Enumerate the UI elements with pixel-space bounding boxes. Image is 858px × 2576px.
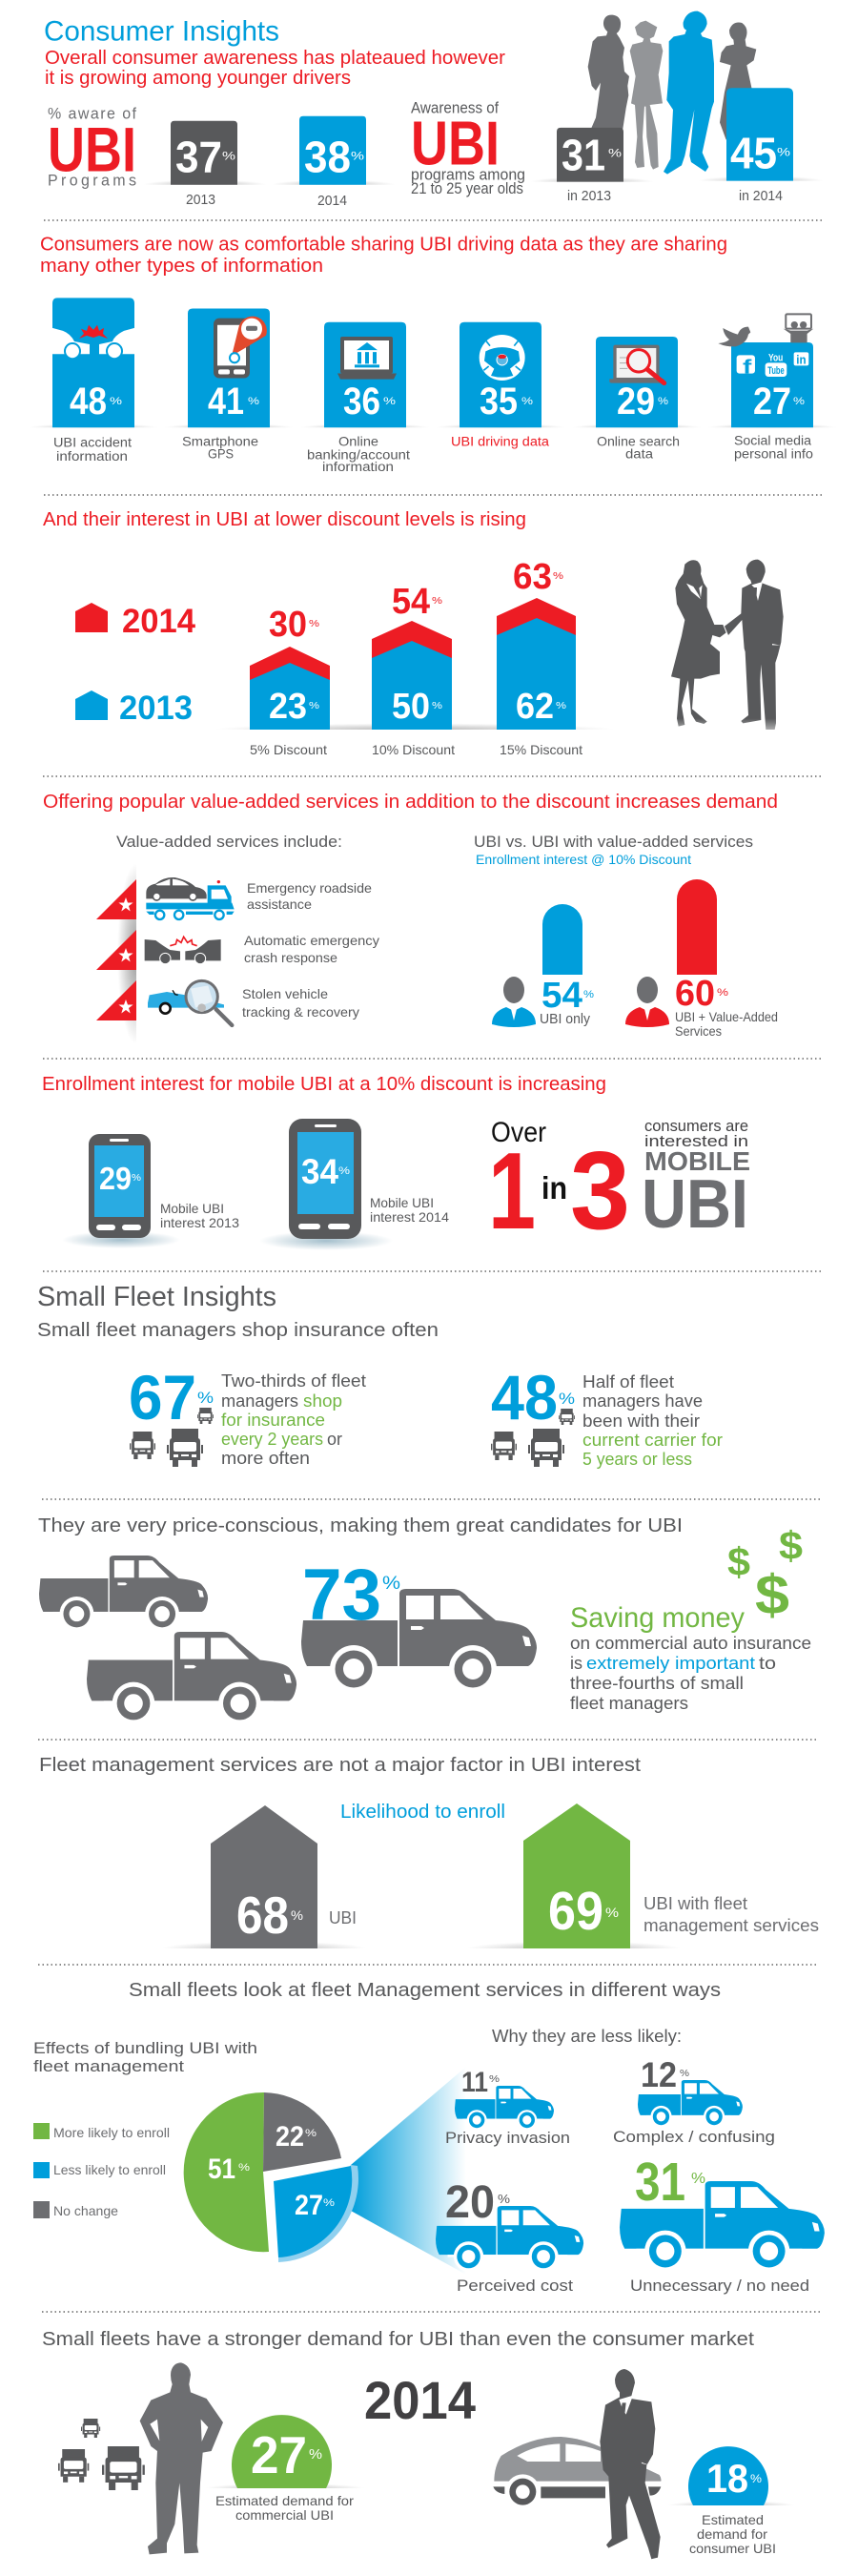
callout: over 1 in 3	[488, 1117, 750, 1252]
bar: UBI only 54 percent	[492, 904, 594, 1027]
stat: 73 percent: %	[382, 1574, 400, 1594]
silhouettes: business handshake	[667, 560, 788, 741]
reason: unnecessary 31 percent: Unnecessary / no need	[630, 2277, 809, 2295]
bar: 10 percent discount: %	[432, 701, 442, 711]
card: online search data 29 percent: 29	[617, 381, 655, 422]
phone: 29 percent 2013: Mobile UBI	[160, 1201, 224, 1216]
panel: fleet management views	[33, 1980, 825, 2295]
bar: 45 percent in 2014: %	[777, 145, 790, 158]
stat: 67 percent: shop	[303, 1391, 342, 1411]
subheading: UBI vs value-added: Enrollment interest @ 10% Discount	[476, 852, 691, 867]
phone: 29 percent 2013	[62, 1134, 239, 1248]
stat: 67 percent: %	[197, 1389, 214, 1407]
bar: 5 percent discount: 5% Discount	[250, 742, 327, 757]
text: saving money: Saving money	[570, 1602, 745, 1634]
card: UBI accident information 48 percent	[29, 298, 158, 464]
bar: 31 percent in 2013: 31	[562, 130, 605, 180]
card: UBI accident information 48 percent: 48	[70, 381, 107, 422]
bar: 31 percent in 2013: in 2013	[567, 188, 611, 204]
stat: 48 percent: 48	[491, 1362, 558, 1432]
label: awareness among 21 to 25 year olds: programs among	[411, 167, 525, 184]
item: emergency roadside assistance	[96, 877, 372, 919]
stat: 67 percent: for insurance	[221, 1411, 325, 1430]
panel: price-conscious	[38, 1515, 811, 1724]
callout: over 1 in 3: MOBILE	[644, 1146, 750, 1176]
card: UBI driving data 35 percent: 35	[480, 381, 518, 422]
card: online search data 29 percent	[572, 337, 702, 462]
subheading: effects of bundling: Effects of bundling UBI with	[33, 2039, 257, 2057]
heading: interest rising: And their interest in UBI at lower discount levels is rising	[43, 509, 526, 530]
bar: UBI only 54 percent: 54	[541, 976, 582, 1016]
stat: 18 percent consumer: demand for	[697, 2526, 767, 2542]
card: UBI driving data 35 percent	[436, 322, 565, 449]
heading: comfort sharing: Consumers are now as comfortable sharing UBI driving data as they are sharing	[40, 235, 727, 256]
stat: 48 percent: 5 years or less	[582, 1450, 692, 1469]
stat: 48 percent: current carrier for	[582, 1431, 723, 1450]
stat: 48 percent: %	[559, 1390, 575, 1408]
bar: 38 percent 2014: 2014	[317, 193, 347, 209]
bar: UBI only 54 percent: UBI only	[540, 1011, 590, 1027]
icon: pickup truck small	[39, 1556, 208, 1631]
card: online banking 36 percent: information	[322, 459, 394, 474]
card: social media personal info 27 percent: %	[793, 396, 805, 407]
callout cone: less likely breakout	[351, 2067, 466, 2275]
heading: mobile enrollment: Enrollment interest for mobile UBI at a 10% discount is increasing	[42, 1074, 606, 1095]
panel: consumer awareness	[44, 11, 824, 209]
bar: 37 percent 2013: 37	[175, 132, 222, 182]
card: online banking 36 percent	[300, 322, 430, 474]
icon: car	[493, 2437, 661, 2509]
pie chart: effects of bundling: 22	[276, 2121, 304, 2153]
bar: 10 percent discount: 10% Discount	[372, 742, 455, 757]
label: percent aware of UBI programs: % aware of	[48, 106, 137, 123]
bar: 5 percent discount	[250, 605, 330, 757]
year label: 2014	[364, 2370, 476, 2430]
panel: interest at lower discounts	[43, 509, 788, 757]
card: UBI accident information 48 percent: information	[56, 448, 128, 464]
bar: 37 percent 2013: %	[222, 149, 235, 162]
card: smartphone GPS 41 percent: 41	[208, 381, 244, 422]
reason: perceived cost 20 percent: %	[498, 2192, 510, 2206]
bar: UBI 68 percent: %	[291, 1907, 303, 1923]
reason: complex confusing 12 percent: Complex / confusing	[613, 2128, 775, 2146]
card: online search data 29 percent: %	[658, 396, 668, 407]
item: emergency roadside assistance: assistance	[247, 896, 312, 912]
bar: UBI 68 percent: UBI	[329, 1908, 357, 1927]
card: social media personal info 27 percent: in	[796, 353, 807, 366]
stat: 18 percent consumer: consumer UBI	[689, 2541, 776, 2556]
silhouette: businessman	[600, 2369, 661, 2559]
label: likelihood to enroll: Likelihood to enroll	[340, 1802, 505, 1823]
card: social media personal info 27 percent: You	[768, 353, 783, 364]
label: awareness among 21 to 25 year olds: UBI	[411, 109, 500, 178]
subheading: UBI vs value-added	[474, 833, 753, 867]
heading: awareness plateau	[45, 48, 505, 89]
text: saving money: extremely important	[586, 1654, 755, 1673]
item: emergency roadside assistance: Emergency roadside	[247, 880, 372, 896]
pie chart: effects of bundling: %	[323, 2197, 335, 2209]
bar: 15 percent discount: 63	[513, 557, 552, 597]
bar: 15 percent discount: 62	[516, 687, 554, 727]
pie chart: effects of bundling: 27	[295, 2190, 323, 2221]
bar: 10 percent discount	[372, 582, 455, 757]
card: social media personal info 27 percent: f	[743, 357, 751, 379]
bar: UBI with fleet management 69 percent: management services	[644, 1916, 819, 1935]
bar: UBI plus value-added 60 percent: UBI + Value-Added	[675, 1009, 778, 1024]
stat: 67 percent: 67	[129, 1362, 196, 1432]
heading: different ways: Small fleets look at fleet Management services in different ways	[129, 1980, 721, 2001]
card: online banking 36 percent: 36	[343, 381, 380, 422]
card: smartphone GPS 41 percent: %	[248, 396, 259, 407]
stat: 67 percent: or	[327, 1430, 342, 1449]
legend: 2014 and 2013: 2014	[122, 603, 196, 640]
card: UBI driving data 35 percent: %	[521, 396, 533, 407]
bar: 15 percent discount	[497, 557, 582, 757]
legend: 2014 and 2013: 2013	[119, 690, 193, 727]
text: saving money	[570, 1602, 811, 1713]
panel: fleet management factor	[39, 1755, 819, 1948]
card: UBI driving data 35 percent: UBI driving data	[451, 433, 549, 449]
title: Small Fleet Insights: Small Fleet Insights	[37, 1282, 276, 1312]
card: online banking 36 percent: banking/account	[307, 447, 410, 463]
phone: 29 percent 2013: 29	[99, 1161, 132, 1196]
callout: over 1 in 3: consumers are	[644, 1117, 748, 1135]
icon: dollar signs: $	[727, 1539, 750, 1584]
stat: 48 percent: Half of fleet	[582, 1372, 674, 1391]
subheading: UBI vs value-added: UBI vs. UBI with value-added services	[474, 833, 753, 851]
reason: perceived cost 20 percent	[436, 2177, 583, 2295]
pie chart: effects of bundling: %	[305, 2128, 317, 2139]
bar: UBI with fleet management 69 percent	[467, 1803, 819, 1948]
stat: 18 percent consumer: 18	[706, 2456, 748, 2501]
legend: pie chart: No change	[53, 2203, 118, 2218]
reason: privacy invasion 11 percent: %	[489, 2074, 500, 2085]
phone: 34 percent 2014: Mobile UBI	[370, 1195, 434, 1210]
panel: value-added services	[43, 792, 778, 1049]
icon: slides person	[784, 314, 813, 342]
icon: pickup truck large	[301, 1589, 537, 1693]
reason: unnecessary 31 percent: 31	[635, 2152, 685, 2213]
card: social media personal info 27 percent: 27	[753, 381, 791, 422]
phone: 34 percent 2014: 34	[301, 1152, 338, 1191]
bar: 10 percent discount: 54	[392, 582, 430, 622]
bar: UBI plus value-added 60 percent: Services	[675, 1023, 722, 1039]
bar: 5 percent discount: 23	[269, 687, 307, 727]
text: saving money: fleet managers	[570, 1694, 688, 1713]
card: smartphone GPS 41 percent: Smartphone	[182, 433, 258, 449]
card: UBI accident information 48 percent: %	[110, 396, 122, 407]
reason: perceived cost 20 percent: Perceived cost	[457, 2277, 573, 2295]
bar: UBI with fleet management 69 percent: 69	[548, 1881, 603, 1942]
stat: 27 percent commercial	[205, 2415, 365, 2523]
heading: shop often: Small fleet managers shop insurance often	[37, 1320, 439, 1341]
card: UBI accident information 48 percent: UBI accident	[53, 434, 132, 450]
card: online search data 29 percent: data	[625, 446, 653, 462]
pie chart: effects of bundling: %	[238, 2162, 250, 2174]
subheading: effects of bundling	[33, 2039, 257, 2075]
bar: 10 percent discount: %	[432, 596, 442, 607]
heading: value-added demand: Offering popular value-added services in addition to the discount increases demand	[43, 792, 778, 813]
panel: demand comparison	[42, 2329, 795, 2559]
reason: complex confusing 12 percent: %	[680, 2069, 689, 2079]
heading: awareness plateau: Overall consumer awareness has plateaued however	[45, 48, 505, 69]
heading: comfort sharing: many other types of information	[40, 256, 323, 277]
phone: 29 percent 2013: %	[132, 1173, 141, 1184]
bar: 45 percent in 2014	[698, 88, 824, 204]
stat: 18 percent consumer: Estimated	[702, 2512, 764, 2527]
text: saving money: to	[759, 1654, 776, 1673]
stat: 27 percent commercial: %	[309, 2446, 322, 2463]
card: social media personal info 27 percent: Social media	[734, 432, 811, 448]
silhouettes: group of young people	[588, 11, 756, 175]
bar: UBI with fleet management 69 percent: %	[605, 1905, 619, 1920]
subheading: effects of bundling: fleet management	[33, 2057, 184, 2075]
reason: unnecessary 31 percent	[620, 2152, 825, 2295]
bar: UBI 68 percent	[162, 1805, 366, 1948]
legend: pie chart: Less likely to enroll	[53, 2162, 166, 2177]
icon: pickup truck medium	[87, 1632, 296, 1724]
stat: 73 percent: 73	[302, 1555, 381, 1636]
card: social media personal info 27 percent	[707, 314, 837, 462]
label: awareness among 21 to 25 year olds	[411, 100, 525, 197]
pie chart: effects of bundling	[184, 2092, 358, 2262]
callout: over 1 in 3: 3	[570, 1128, 630, 1252]
stat: 67 percent	[129, 1362, 366, 1468]
stat: 67 percent: managers	[221, 1391, 298, 1411]
icon: dollar signs	[727, 1523, 803, 1626]
card: social media personal info 27 percent: personal info	[734, 446, 813, 462]
phone: 34 percent 2014	[259, 1119, 449, 1250]
text: saving money: is	[570, 1654, 582, 1673]
silhouette: fleet worker	[140, 2362, 223, 2554]
reason: privacy invasion 11 percent: 11	[461, 2067, 488, 2098]
bar: 38 percent 2014: %	[351, 149, 364, 162]
bar: UBI 68 percent: 68	[236, 1886, 289, 1945]
panel: comfort sharing data	[29, 235, 837, 474]
bar: UBI only 54 percent: %	[583, 989, 594, 1000]
bar: UBI plus value-added 60 percent: %	[717, 987, 728, 999]
item: stolen vehicle tracking and recovery	[96, 980, 359, 1025]
stat: 67 percent: Two-thirds of fleet	[221, 1371, 366, 1391]
stat: 48 percent	[491, 1362, 723, 1469]
phone: 34 percent 2014: %	[338, 1165, 350, 1177]
icon: delivery trucks	[58, 2419, 145, 2490]
item: automatic emergency crash response	[96, 930, 379, 970]
bar: 5 percent discount: %	[309, 701, 319, 711]
label: awareness among 21 to 25 year olds: Awareness of	[411, 100, 499, 117]
icon: dollar signs: $	[779, 1523, 803, 1568]
item: automatic emergency crash response: Automatic emergency	[244, 933, 379, 948]
title: Consumer Insights: Consumer Insights	[44, 16, 279, 48]
icon: twitter bird	[718, 327, 750, 346]
phone: 29 percent 2013: interest 2013	[160, 1215, 239, 1230]
bar: 45 percent in 2014: in 2014	[739, 188, 783, 204]
phone: 34 percent 2014: interest 2014	[370, 1209, 449, 1225]
reason: complex confusing 12 percent: 12	[641, 2055, 677, 2094]
text: saving money: on commercial auto insurance	[570, 1634, 811, 1653]
legend: 2014 and 2013	[75, 603, 196, 727]
reason: complex confusing 12 percent	[613, 2055, 775, 2146]
card: smartphone GPS 41 percent: GPS	[208, 446, 234, 462]
panel: mobile UBI	[42, 1074, 750, 1252]
card: online banking 36 percent: Online	[338, 433, 378, 449]
bar: 31 percent in 2013	[530, 128, 654, 204]
stat: 27 percent commercial: 27	[251, 2425, 307, 2484]
bar: UBI with fleet management 69 percent: UBI with fleet	[644, 1894, 747, 1913]
bar: 5 percent discount: 30	[269, 605, 307, 645]
callout: over 1 in 3: 1	[488, 1131, 536, 1252]
card: online search data 29 percent: Online search	[597, 433, 680, 449]
reason: perceived cost 20 percent: 20	[445, 2177, 495, 2228]
callout: over 1 in 3: Over	[491, 1117, 546, 1148]
text: saving money: three-fourths of small	[570, 1674, 744, 1693]
stat: 18 percent consumer: %	[750, 2472, 762, 2485]
card: smartphone GPS 41 percent	[164, 309, 294, 462]
bar: 37 percent 2013: 2013	[186, 192, 215, 208]
label: percent aware of UBI programs: UBI	[48, 114, 136, 185]
icon: dollar signs: $	[755, 1564, 789, 1626]
heading: not a major factor: Fleet management services are not a major factor in UBI interest	[39, 1755, 641, 1776]
bar: 31 percent in 2013: %	[608, 146, 622, 159]
bar: 5 percent discount: %	[309, 619, 319, 629]
subheading: why less likely: Why they are less likely:	[492, 2027, 682, 2046]
heading: awareness plateau: it is growing among younger drivers	[45, 68, 351, 89]
legend: pie chart: More likely to enroll	[53, 2125, 170, 2140]
bar: UBI plus value-added 60 percent: 60	[675, 974, 715, 1014]
bar: 15 percent discount: 15% Discount	[500, 742, 582, 757]
card: online banking 36 percent: %	[383, 396, 396, 407]
callout: over 1 in 3: interested in	[644, 1132, 748, 1150]
reason: unnecessary 31 percent: %	[691, 2171, 705, 2187]
label: percent aware of UBI programs: Programs	[48, 173, 136, 190]
stat: 67 percent: more often	[221, 1449, 310, 1468]
bar: 15 percent discount: %	[553, 571, 563, 582]
heading: price-conscious: They are very price-conscious, making them great candidates for UBI	[38, 1515, 683, 1536]
legend: pie chart	[33, 2123, 170, 2218]
bar: 15 percent discount: %	[556, 701, 566, 711]
heading: comfort sharing	[40, 235, 727, 277]
card: social media personal info 27 percent: Tube	[767, 365, 785, 377]
panel: small fleet shopping	[37, 1282, 723, 1469]
reason: privacy invasion 11 percent	[445, 2067, 570, 2147]
bar: 45 percent in 2014: 45	[730, 128, 777, 178]
pie chart: effects of bundling: 51	[208, 2154, 235, 2185]
item: automatic emergency crash response: crash response	[244, 950, 337, 965]
subheading: value-added services include: Value-added services include:	[116, 833, 342, 851]
bar: 10 percent discount: 50	[392, 687, 430, 727]
stat: 18 percent consumer	[667, 2446, 795, 2556]
stat: 48 percent: managers have	[582, 1391, 703, 1411]
bar: 38 percent 2014: 38	[304, 132, 351, 182]
item: stolen vehicle tracking and recovery: Stolen vehicle	[242, 986, 328, 1001]
label: awareness among 21 to 25 year olds: 21 to 25 year olds	[411, 180, 523, 197]
bar: UBI plus value-added 60 percent	[625, 879, 778, 1039]
stat: 27 percent commercial: Estimated demand for	[215, 2493, 354, 2508]
stat: 67 percent: every 2 years	[221, 1430, 323, 1449]
stat: 27 percent commercial: commercial UBI	[235, 2507, 334, 2523]
heading: stronger demand: Small fleets have a stronger demand for UBI than even the consumer market	[42, 2329, 754, 2350]
reason: privacy invasion 11 percent: Privacy invasion	[445, 2129, 570, 2147]
bar: 37 percent 2013	[143, 121, 267, 208]
callout: over 1 in 3: UBI	[642, 1166, 748, 1243]
bar: 38 percent 2014	[272, 116, 396, 209]
item: stolen vehicle tracking and recovery: tracking & recovery	[242, 1004, 359, 1020]
callout: over 1 in 3: in	[541, 1170, 567, 1206]
stat: 48 percent: been with their	[582, 1412, 700, 1431]
